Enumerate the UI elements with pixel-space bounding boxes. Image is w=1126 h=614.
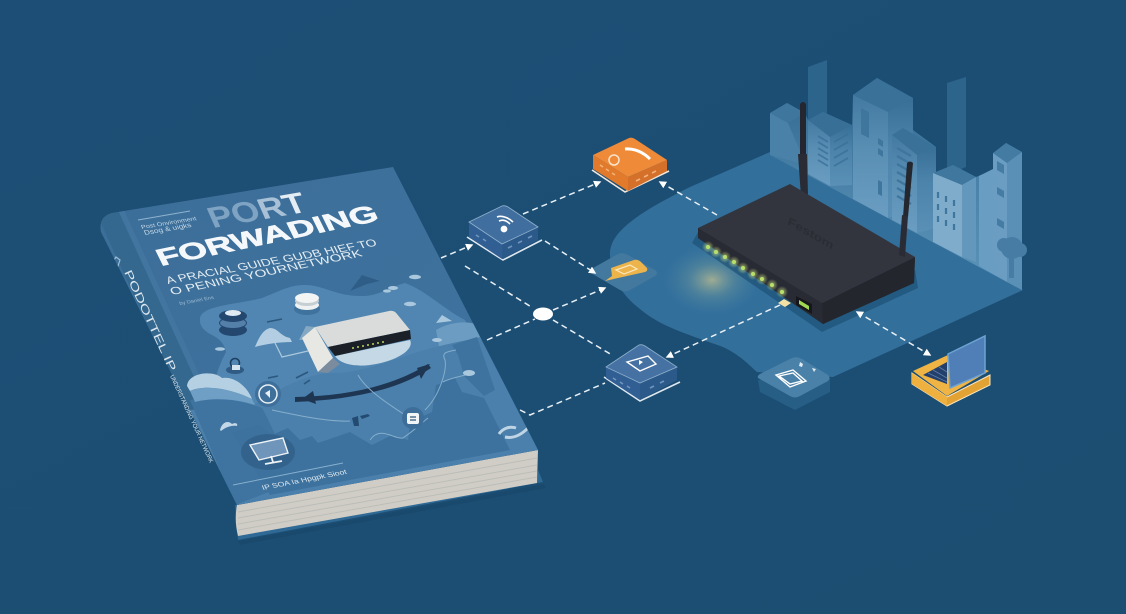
building C xyxy=(853,78,913,218)
left cloud xyxy=(187,373,255,405)
keyboard xyxy=(923,362,947,384)
cube: wifi xyxy=(467,206,542,260)
title: PORT: PORT xyxy=(202,186,312,234)
upper right tower xyxy=(452,337,495,396)
picture glyph xyxy=(627,356,656,371)
small cloud centre xyxy=(255,328,292,347)
cover artwork xyxy=(95,210,538,510)
green port xyxy=(796,296,812,314)
spine text xyxy=(121,268,214,464)
wifi glyph xyxy=(497,216,513,232)
lower land band xyxy=(190,336,538,505)
double arrow xyxy=(295,364,431,404)
page block xyxy=(236,450,538,536)
dashed connectors xyxy=(441,182,930,357)
floating dashes xyxy=(267,319,310,384)
spine text: PODOTTEL IP xyxy=(121,268,178,373)
top rule xyxy=(138,211,190,220)
cover xyxy=(100,167,538,505)
land blob xyxy=(200,283,466,404)
dashed links xyxy=(465,266,612,415)
skyline dark xyxy=(268,378,510,495)
building D xyxy=(892,128,936,233)
small marks xyxy=(799,362,816,372)
under router pale blob xyxy=(335,340,411,366)
target icon xyxy=(255,381,281,407)
building H xyxy=(993,143,1022,290)
building B xyxy=(808,112,852,186)
icon tile: yellow tag xyxy=(590,253,657,292)
junction dot xyxy=(533,308,553,320)
spine icon xyxy=(114,257,120,269)
status LEDs xyxy=(702,241,788,298)
cover small text: Dsog & uigks xyxy=(143,222,193,237)
book router xyxy=(299,311,411,373)
building G xyxy=(979,169,993,274)
title: FORWADING: FORWADING xyxy=(151,200,383,271)
book xyxy=(95,167,546,545)
cube: orange xyxy=(592,138,669,192)
monitor xyxy=(241,434,295,470)
connector line xyxy=(275,343,308,357)
author small text: by Daniel Ens xyxy=(178,295,216,307)
left lower area xyxy=(190,399,274,504)
city skyline xyxy=(770,60,1027,290)
pale right band xyxy=(436,322,482,346)
screen xyxy=(948,336,985,388)
router xyxy=(692,102,918,332)
device glyph xyxy=(776,370,806,387)
infographic canvas xyxy=(100,60,1027,540)
circuit lines xyxy=(272,350,470,440)
back cover xyxy=(235,470,543,540)
book shadow xyxy=(238,484,546,545)
router body xyxy=(698,184,915,324)
database dark xyxy=(219,310,247,336)
subtitle xyxy=(164,237,379,298)
floor panel xyxy=(610,152,1023,377)
cover small text: Post Onvironment xyxy=(140,216,198,231)
laptop deck xyxy=(913,355,989,396)
small dark marks xyxy=(352,414,370,426)
gear glyph xyxy=(609,155,619,165)
antenna front xyxy=(899,162,913,257)
small cloud lower xyxy=(220,422,237,431)
antenna back xyxy=(798,102,808,197)
laptop xyxy=(912,336,990,406)
ghost towers xyxy=(808,60,966,175)
lock icon xyxy=(226,358,244,374)
yellow connector xyxy=(778,299,791,307)
curved arrow glyph xyxy=(625,149,650,159)
chip icon xyxy=(402,407,424,429)
database white xyxy=(294,293,320,315)
spine strip xyxy=(95,210,252,510)
spine bottom icon xyxy=(224,491,230,505)
cube: image xyxy=(604,345,680,401)
floor icon tile xyxy=(758,357,830,410)
subtitle: O PENING YOURNETWORK xyxy=(168,248,365,298)
building A xyxy=(770,103,806,165)
building F xyxy=(933,165,976,262)
bottom rule xyxy=(233,463,343,485)
recycle icon xyxy=(499,427,528,437)
subtitle: A PRACIAL GUIDE GUDB HIEF TO xyxy=(164,237,379,287)
router logo: Festom xyxy=(786,215,835,252)
glow under router xyxy=(662,244,762,316)
floating pale clouds xyxy=(215,275,475,376)
laptop base xyxy=(912,373,990,406)
tag glyph xyxy=(605,260,647,281)
cover small text xyxy=(140,216,198,237)
wall base xyxy=(770,78,1022,290)
tree xyxy=(997,237,1027,278)
publisher text: IP SOA Ia Hpgpk Sioot xyxy=(261,469,348,492)
dark peak xyxy=(350,275,380,291)
router shadow xyxy=(692,232,918,332)
spine text: UNDERSTANDING YOUR NETWORK xyxy=(168,374,214,464)
